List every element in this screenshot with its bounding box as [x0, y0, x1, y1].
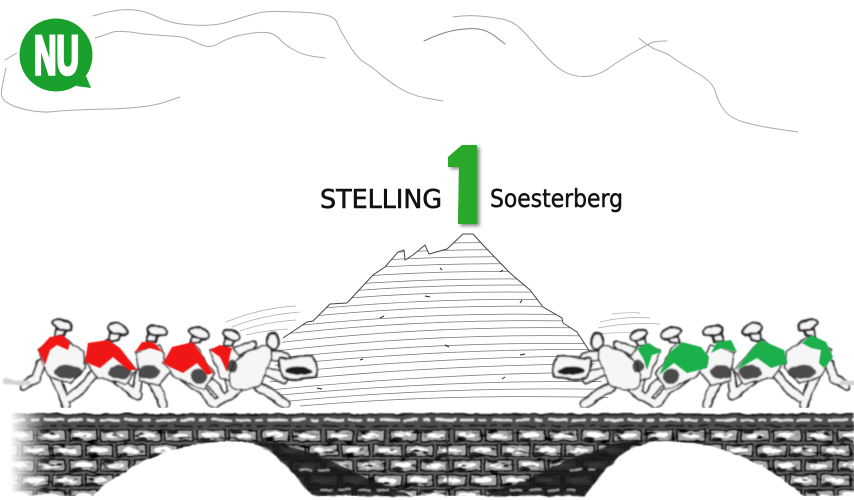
green shirts — [637, 335, 833, 375]
mountain — [265, 234, 608, 406]
bridge — [0, 414, 854, 496]
big green number 1: 1 — [431, 122, 494, 248]
title: STELLING: STELLING — [320, 185, 442, 215]
red shirts — [38, 335, 232, 375]
side hatching lines — [226, 306, 660, 335]
title: Soesterberg: Soesterberg — [490, 184, 623, 213]
left team: runners in red — [6, 317, 317, 405]
logo: NU speech bubble: NU — [34, 24, 79, 86]
logo: NU speech bubble — [20, 18, 92, 92]
sketched clouds and hills — [1, 10, 798, 132]
right team: runners in green — [553, 317, 854, 405]
